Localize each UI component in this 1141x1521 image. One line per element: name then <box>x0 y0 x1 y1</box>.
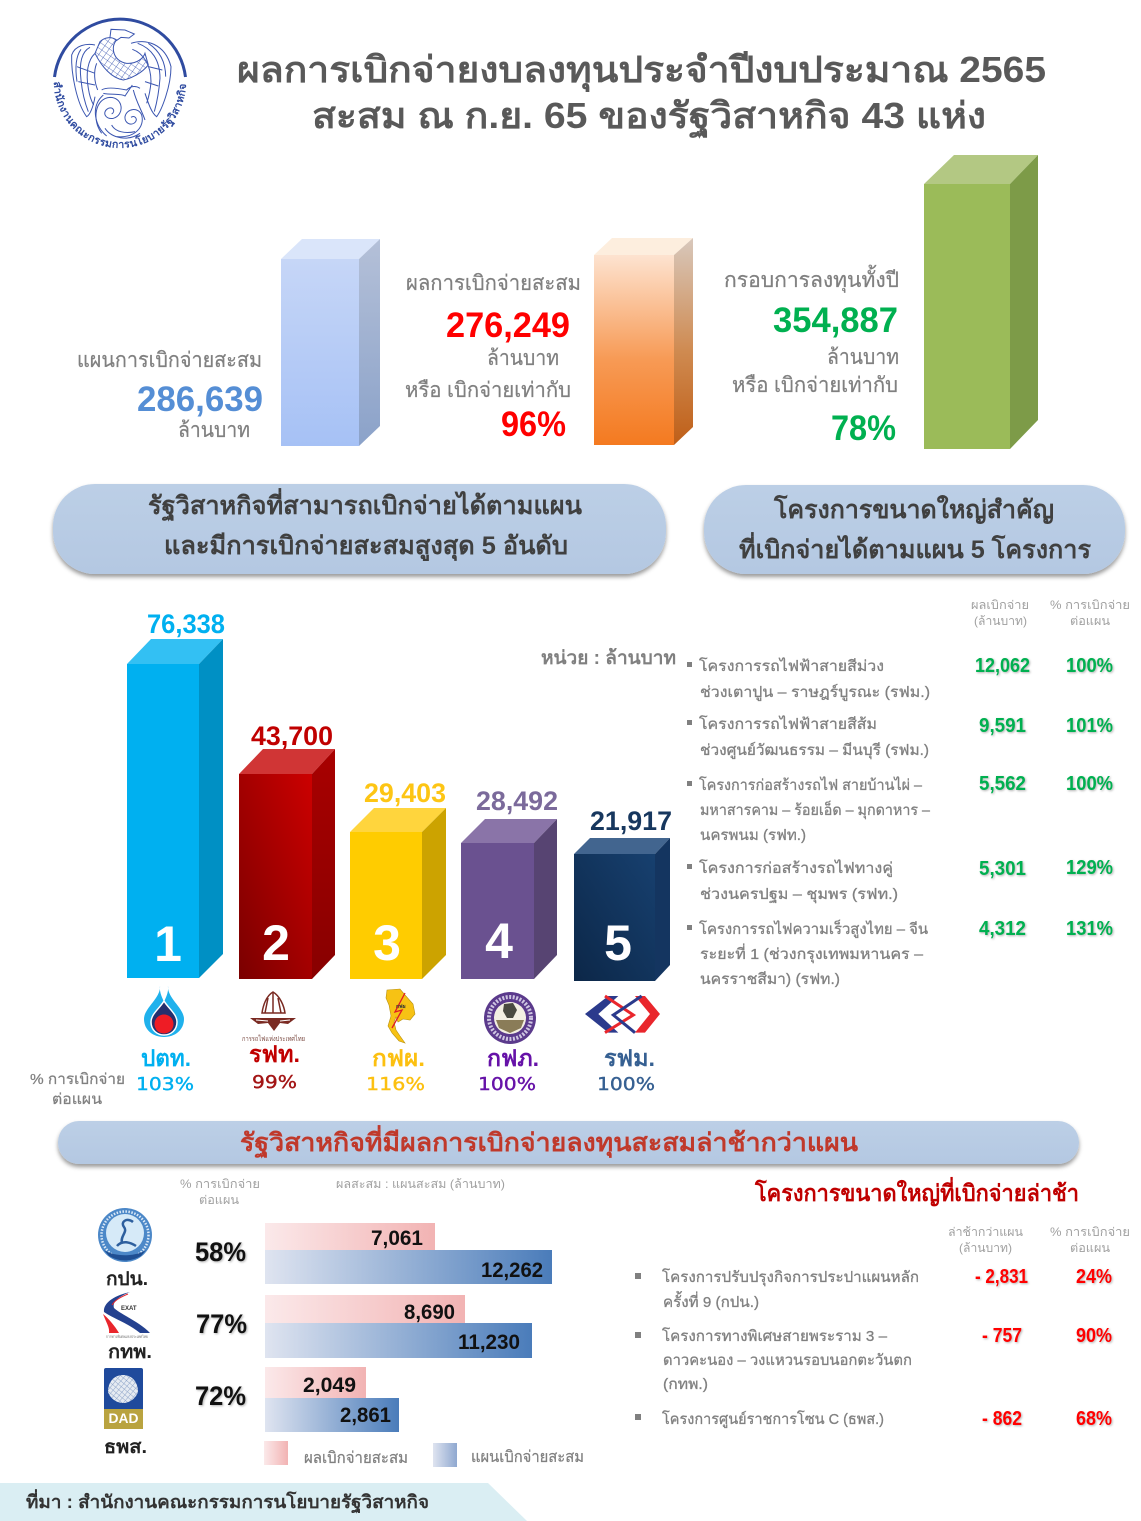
bars: EXAT <box>265 1295 532 1358</box>
label: delayed percent: 72% <box>195 1381 246 1411</box>
legend: แผนเบิกจ่ายสะสม <box>471 1449 584 1466</box>
label: enterprise abbreviations and percent: 103% <box>136 1074 194 1095</box>
panel heading: top five large projects: ที่เบิกจ่ายได้ตามแผน 5 โครงการ <box>739 532 1092 564</box>
column 3: EGAT <box>350 778 446 979</box>
icon: PEA logo <box>484 992 536 1044</box>
label: enterprise abbreviations and percent: % การเบิกจ่าย <box>30 1071 125 1088</box>
label: delayed enterprise abbreviations: กทพ. <box>108 1342 152 1363</box>
delayed project 2: 90% <box>1076 1325 1112 1347</box>
delayed project 2: (กทพ.) <box>663 1376 708 1393</box>
project 4: ช่วงนครปฐม – ชุมพร (รฟท.) <box>700 886 898 904</box>
project 5: นครราชสีมา) (รฟท.) <box>700 971 840 988</box>
label: enterprise abbreviations and percent: ต่อแผน <box>52 1091 102 1108</box>
panel heading: delayed enterprises: รัฐวิสาหกิจที่มีผลการเบิกจ่ายลงทุนสะสมล่าช้ากว่าแผน <box>240 1125 858 1159</box>
delayed project 3: 68% <box>1076 1408 1112 1430</box>
table heading: delayed large projects: โครงการขนาดใหญ่ที่เบิกจ่ายล่าช้า <box>754 1176 1079 1207</box>
bars: EXAT: 11,230 <box>458 1331 520 1354</box>
column 1: PTT <box>127 609 225 978</box>
icon: MRTA logo <box>585 996 660 1033</box>
panel heading: top five enterprises: รัฐวิสาหกิจที่สามารถเบิกจ่ายได้ตามแผน <box>148 488 582 522</box>
column 5: MRTA: 5 <box>604 915 632 971</box>
label: delayed enterprise abbreviations <box>104 1269 152 1458</box>
icon: DAD logo <box>104 1368 143 1429</box>
project 3 <box>687 773 1113 844</box>
icon: EGAT logo, map of Thailand: กฟผ <box>396 1003 406 1010</box>
project 4: 129% <box>1066 857 1113 879</box>
column headers: ต่อแผน <box>1070 614 1110 628</box>
column headers: (ล้านบาท) <box>959 1241 1012 1255</box>
label: enterprise abbreviations and percent <box>30 1041 655 1108</box>
project 5: ระยะที่ 1 (ช่วงกรุงเทพมหานคร – <box>700 943 924 964</box>
logo: state enterprise policy office <box>53 18 187 148</box>
project 5 <box>687 918 1113 988</box>
column 5: MRTA <box>574 806 672 981</box>
column 4: PEA: 28,492 <box>476 786 558 816</box>
chart header labels: % การเบิกจ่าย <box>180 1177 260 1191</box>
text block: annual investment: 354,887 <box>773 301 898 340</box>
unit label: หน่วย : ล้านบาท <box>541 647 676 669</box>
table: delayed large projects <box>635 1225 1130 1430</box>
column 4: PEA: 4 <box>485 913 513 969</box>
column headers: % การเบิกจ่าย <box>1050 1225 1130 1239</box>
project 2 <box>687 715 1113 760</box>
bars: DAD: 2,049 <box>303 1374 356 1397</box>
project 1: 12,062 <box>975 655 1030 677</box>
label: enterprise abbreviations and percent: 100% <box>597 1074 655 1095</box>
icon: MWA logo <box>98 1208 152 1262</box>
panel heading: top five large projects: โครงการขนาดใหญ่สำคัญ <box>773 494 1054 524</box>
label: enterprise abbreviations and percent: 100% <box>478 1074 536 1095</box>
column 1: PTT: 76,338 <box>147 609 225 639</box>
label: enterprise abbreviations and percent: ปตท. <box>141 1045 191 1071</box>
project 3: 5,562 <box>979 773 1026 795</box>
text block: annual investment: หรือ เบิกจ่ายเท่ากับ <box>732 374 898 397</box>
text block: cumulative disbursement: 96% <box>501 405 566 444</box>
column 3: EGAT: 29,403 <box>364 778 446 808</box>
legend <box>264 1441 584 1467</box>
chart header labels <box>180 1177 505 1207</box>
column headers: ต่อแผน <box>1070 1241 1110 1255</box>
project 2: 101% <box>1066 715 1113 737</box>
project 2: ช่วงศูนย์วัฒนธรรม – มีนบุรี (รฟม.) <box>700 742 929 760</box>
project 2: 9,591 <box>979 715 1026 737</box>
icon: DAD logo: DAD <box>108 1410 138 1426</box>
text block: cumulative disbursement: 276,249 <box>446 306 570 345</box>
delayed project 3 <box>635 1408 1112 1430</box>
text block: cumulative disbursement: หรือ เบิกจ่ายเท่ากับ <box>405 379 571 402</box>
legend: ผลเบิกจ่ายสะสม <box>304 1450 408 1467</box>
column 2: SRT <box>239 721 335 979</box>
text block: cumulative disbursement: ผลการเบิกจ่ายสะสม <box>406 272 581 295</box>
icon: SRT logo: การรถไฟแห่งประเทศไทย <box>242 1034 305 1043</box>
icon: EGAT logo, map of Thailand <box>386 989 415 1043</box>
delayed project 1: โครงการปรับปรุงกิจการประปาแผนหลัก <box>662 1268 919 1287</box>
chart: top five 3D columns <box>127 609 672 981</box>
text block: cumulative plan: ล้านบาท <box>178 419 250 442</box>
column 2: SRT: 2 <box>262 915 290 971</box>
label: delayed percent <box>195 1237 247 1411</box>
project 3: นครพนม (รฟท.) <box>700 827 806 844</box>
text block: annual investment: กรอบการลงทุนทั้งปี <box>724 265 899 293</box>
icon: EXAT logo: EXAT <box>121 1306 137 1312</box>
text block: annual investment: 78% <box>831 409 896 448</box>
panel heading: delayed enterprises <box>58 1121 1079 1164</box>
label: delayed percent: 77% <box>196 1309 247 1339</box>
label: enterprise abbreviations and percent: 99% <box>252 1072 297 1093</box>
panel heading: top five large projects <box>704 485 1125 574</box>
project 2: โครงการรถไฟฟ้าสายสีส้ม <box>699 715 877 733</box>
bars: EXAT: 8,690 <box>404 1301 455 1324</box>
column headers <box>971 598 1130 628</box>
delayed project 1 <box>635 1266 1112 1311</box>
text block: cumulative disbursement <box>405 272 581 444</box>
delayed project 2 <box>635 1325 1112 1393</box>
title: สะสม ณ ก.ย. 65 ของรัฐวิสาหกิจ 43 แห่ง <box>312 95 986 139</box>
project 4 <box>687 857 1113 904</box>
project 1: โครงการรถไฟฟ้าสายสีม่วง <box>699 657 884 675</box>
bar chart: actual vs plan <box>265 1223 552 1432</box>
project 5: 4,312 <box>979 918 1026 940</box>
column headers: ล่าช้ากว่าแผน <box>948 1225 1023 1239</box>
label: enterprise abbreviations and percent: กฟภ. <box>487 1045 539 1071</box>
chart header labels: ผลสะสม : แผนสะสม (ล้านบาท) <box>336 1177 505 1191</box>
footer: source <box>0 1483 527 1521</box>
column headers: ผลเบิกจ่าย <box>971 598 1029 612</box>
delayed project 1: - 2,831 <box>975 1266 1028 1288</box>
delayed project 1: 24% <box>1076 1266 1112 1288</box>
label: enterprise abbreviations and percent: รฟท. <box>249 1041 300 1067</box>
bars: MWA: 12,262 <box>481 1259 543 1282</box>
column headers <box>948 1225 1130 1255</box>
footer: source: ที่มา : สำนักงานคณะกรรมการนโยบายรัฐวิสาหกิจ <box>26 1489 429 1514</box>
column 4: PEA <box>461 786 558 979</box>
project 5: 131% <box>1066 918 1113 940</box>
icon: SRT logo <box>242 992 305 1043</box>
title: ผลการเบิกจ่ายงบลงทุนประจำปีงบประมาณ 2565 <box>237 49 1046 93</box>
delayed project 2: โครงการทางพิเศษสายพระราม 3 – <box>662 1327 888 1345</box>
chart header labels: ต่อแผน <box>199 1193 239 1207</box>
delayed project 3: โครงการศูนย์ราชการโซน C (ธพส.) <box>662 1410 884 1428</box>
label: enterprise abbreviations and percent: 116% <box>366 1074 425 1095</box>
bars: DAD: 2,861 <box>340 1404 391 1427</box>
project 5: โครงการรถไฟความเร็วสูงไทย – จีน <box>699 919 928 938</box>
column 1: PTT: 1 <box>154 916 182 972</box>
column 5: MRTA: 21,917 <box>590 806 672 836</box>
chart: annual investment column <box>924 155 1038 449</box>
text block: cumulative disbursement: ล้านบาท <box>487 347 559 370</box>
icon: PTT logo <box>144 986 184 1037</box>
label: enterprise abbreviations and percent: กฟผ. <box>372 1045 425 1071</box>
icon: EXAT logo <box>103 1292 150 1339</box>
chart: cumulative plan column <box>281 239 380 446</box>
project 3: 100% <box>1066 773 1113 795</box>
table: on-plan large projects <box>687 598 1130 988</box>
delayed project 2: - 757 <box>982 1325 1022 1347</box>
delayed project 3: - 862 <box>982 1408 1022 1430</box>
project 3: โครงการก่อสร้างรถไฟ สายบ้านไผ่ – <box>699 776 923 794</box>
panel heading: top five enterprises: และมีการเบิกจ่ายสะสมสูงสุด 5 อันดับ <box>164 532 568 562</box>
column headers: % การเบิกจ่าย <box>1050 598 1130 612</box>
bars: MWA: 7,061 <box>371 1227 423 1250</box>
text block: cumulative plan <box>77 349 263 442</box>
column 3: EGAT: 3 <box>373 915 401 971</box>
label: enterprise abbreviations and percent: รฟม. <box>604 1045 655 1071</box>
bars: DAD <box>265 1367 399 1432</box>
project 1: 100% <box>1066 655 1113 677</box>
delayed project 1: ครั้งที่ 9 (กปน.) <box>663 1291 759 1311</box>
logo: state enterprise policy office: สำนักงานคณะกรรมการนโยบายรัฐวิสาหกิจ <box>54 82 186 148</box>
label: delayed percent: 58% <box>195 1237 246 1267</box>
title <box>237 49 1046 139</box>
column headers: (ล้านบาท) <box>974 614 1027 628</box>
label: delayed enterprise abbreviations: กปน. <box>106 1269 148 1290</box>
label: delayed enterprise abbreviations: ธพส. <box>104 1437 147 1458</box>
text block: cumulative plan: 286,639 <box>137 380 263 419</box>
project 4: โครงการก่อสร้างรถไฟทางคู่ <box>699 859 893 877</box>
bars: MWA <box>265 1223 552 1284</box>
project 1 <box>687 655 1113 701</box>
text block: cumulative plan: แผนการเบิกจ่ายสะสม <box>77 349 262 372</box>
icon: EXAT logo: การทางพิเศษแห่งประเทศไทย <box>106 1334 148 1339</box>
column 2: SRT: 43,700 <box>251 721 333 751</box>
project 3: มหาสารคาม – ร้อยเอ็ด – มุกดาหาร – <box>700 800 931 820</box>
chart: cumulative disbursement column <box>594 238 693 445</box>
delayed project 2: ดาวคะนอง – วงแหวนรอบนอกตะวันตก <box>663 1352 912 1369</box>
text block: annual investment: ล้านบาท <box>827 346 899 369</box>
project 1: ช่วงเตาปูน – ราษฎร์บูรณะ (รฟม.) <box>700 684 930 701</box>
text block: annual investment <box>724 265 899 448</box>
project 4: 5,301 <box>979 858 1026 880</box>
panel heading: top five enterprises <box>53 484 666 574</box>
